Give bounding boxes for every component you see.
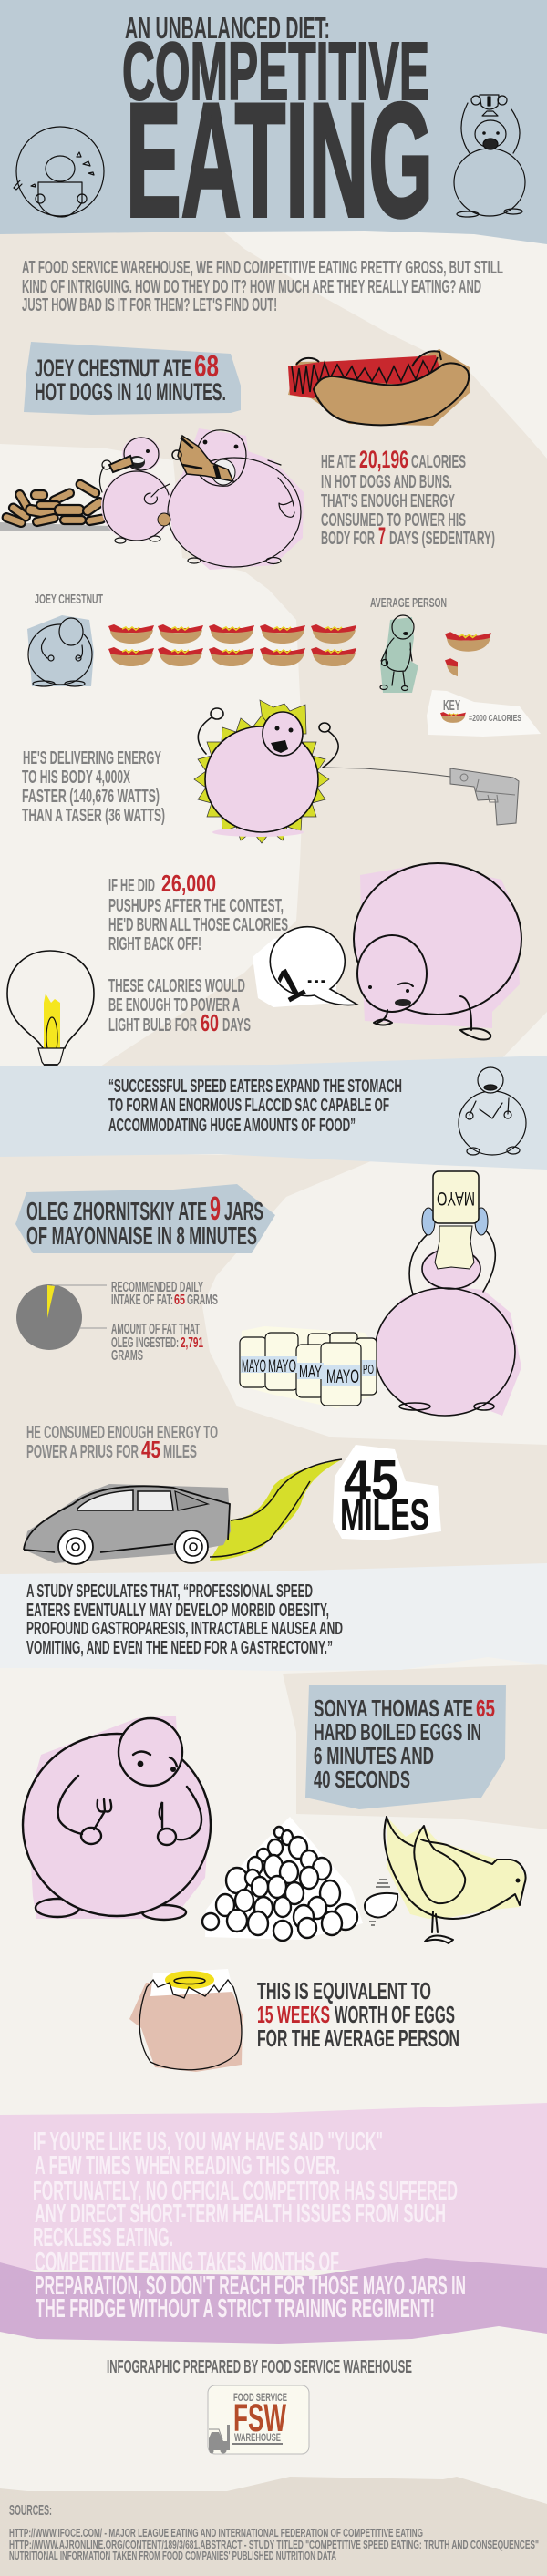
callout: Sonya Thomas: 40 SECONDS: [314, 1766, 410, 1793]
panel: sources: NUTRITIONAL INFORMATION TAKEN FROM FOOD COMPANIES' PUBLISHED NUTRITION DATA: [9, 2549, 336, 2562]
illustration: egg pile: [202, 1817, 363, 1941]
conclusion text: RECKLESS EATING.: [33, 2223, 173, 2252]
legend: key: KEY: [443, 698, 460, 714]
title: [122, 11, 433, 251]
speech text: ...: [306, 968, 326, 986]
icon: taser gun with wire: [325, 768, 519, 825]
stats text: calories: CALORIES: [411, 452, 466, 472]
illustration: figure drinking mayo: [375, 1171, 521, 1416]
panel: conclusion: [0, 2103, 547, 2344]
callout: Sonya Thomas: 65: [476, 1695, 495, 1722]
callout: Joey Chestnut: HOT DOGS IN 10 MINUTES.: [35, 378, 226, 406]
panel: study quote band: EATERS EVENTUALLY MAY DEVELOP MORBID OBESITY,: [26, 1601, 329, 1621]
callout: Sonya Thomas: [305, 1685, 506, 1809]
header panel: [0, 0, 547, 251]
text: light bulb: [108, 976, 251, 1036]
icon: single egg: [365, 1880, 397, 1925]
callout: Oleg Zhornitskiy: [15, 1184, 275, 1253]
callout: Oleg Zhornitskiy: 9: [210, 1190, 221, 1227]
jar labels: MAYO: [242, 1357, 266, 1376]
logo: FSW: WAREHOUSE: [234, 2431, 281, 2444]
speech text: 1: [268, 957, 312, 1012]
callout: Joey Chestnut: [24, 342, 241, 415]
jar labels: [242, 1357, 374, 1387]
icon: light bulb: [7, 951, 94, 1073]
callout: Oleg Zhornitskiy: OLEG ZHORNITSKIY ATE: [26, 1197, 207, 1225]
illustration: small figure feeding hot dog: [99, 437, 172, 543]
graphic: 45 miles: 45: [344, 1449, 398, 1512]
jar labels: PO: [363, 1362, 374, 1377]
panel: sources: [0, 2477, 547, 2576]
jar label: MAYO: [437, 1188, 475, 1209]
illustration: figure with fork and knife: [23, 1716, 211, 1920]
text: 15 weeks: 15 WEEKS: [257, 2001, 330, 2028]
chart labels: RECOMMENDED DAILY: [111, 1280, 203, 1295]
stats text: calories: HE ATE: [321, 452, 356, 472]
illustration: mayo jars: [239, 1326, 377, 1408]
chart labels: GRAMS: [187, 1293, 218, 1308]
chart labels: [111, 1280, 218, 1364]
text: light bulb: 60: [201, 1009, 219, 1036]
icon: large hot dog: [288, 349, 470, 426]
panel: study quote band: A STUDY SPECULATES THAT, “PROFESSIONAL SPEED: [26, 1582, 313, 1602]
stats text: calories: IN HOT DOGS AND BUNS.: [321, 472, 452, 492]
chart labels: INTAKE OF FAT:: [111, 1293, 173, 1308]
chart labels: 65: [174, 1293, 185, 1308]
text: delivering energy: TO HIS BODY 4,000X: [22, 768, 130, 788]
text: pushups: HE'D BURN ALL THOSE CALORIES: [108, 915, 288, 935]
text: 15 weeks: WORTH OF EGGS: [335, 2001, 455, 2028]
text: light bulb: BE ENOUGH TO POWER A: [108, 995, 240, 1015]
comparison: average person: AVERAGE PERSON: [370, 596, 447, 611]
text: Prius: [26, 1423, 218, 1463]
illustration: car with exhaust: [24, 1459, 342, 1564]
panel: study quote band: VOMITING, AND EVEN THE NEED FOR A GASTRECTOMY.”: [26, 1638, 333, 1658]
chart labels: GRAMS: [111, 1348, 143, 1364]
icon: figure with cutlery: [459, 1067, 526, 1155]
text: delivering energy: THAN A TASER (36 WATTS): [22, 806, 165, 826]
text: 15 weeks: THIS IS EQUIVALENT TO: [257, 1977, 431, 2004]
jar labels: MAY: [299, 1363, 322, 1381]
stats text: calories: 20,196: [359, 446, 408, 473]
text: pushups: RIGHT BACK OFF!: [108, 934, 201, 954]
text: pushups: PUSHUPS AFTER THE CONTEST,: [108, 896, 284, 916]
quote text: ACCOMMODATING HUGE AMOUNTS OF FOOD”: [108, 1116, 356, 1136]
panel: study quote band: PROFOUND GASTROPARESIS, INTRACTABLE NAUSEA AND: [26, 1619, 343, 1639]
stats text: calories: 7: [378, 522, 386, 550]
legend: key: [427, 690, 541, 737]
illustration: cracked egg: [129, 1969, 243, 2072]
text: light bulb: DAYS: [222, 1015, 251, 1036]
stats text: calories: THAT'S ENOUGH ENERGY: [321, 491, 455, 511]
conclusion text: [33, 2128, 466, 2324]
text: Prius: POWER A PRIUS FOR: [26, 1442, 139, 1462]
text: light bulb: THESE CALORIES WOULD: [108, 976, 245, 996]
illustration: chicken: [384, 1817, 527, 1943]
logo: FSW: FSW: [233, 2396, 286, 2440]
icon: figure eating from bowl: [14, 127, 104, 217]
text: delivering energy: [22, 748, 165, 826]
hot dog pictogram: 1.25 units: [445, 632, 491, 678]
illustration: hot dog pile on plate: [0, 479, 111, 531]
icon: blue figure: [27, 615, 94, 686]
text: delivering energy: HE'S DELIVERING ENERGY: [23, 748, 161, 768]
title: AN UNBALANCED DIET:: [125, 11, 330, 45]
text: pushups: IF HE DID: [108, 876, 155, 896]
illustration: Joey Chestnut big figure eating: [158, 428, 304, 570]
stats text: calories: BODY FOR: [321, 529, 375, 549]
chart labels: AMOUNT OF FAT THAT: [111, 1322, 200, 1337]
icon: green figure: [380, 615, 418, 693]
chart labels: 2,791: [181, 1335, 203, 1351]
graphic: 45 miles: [333, 1445, 441, 1540]
illustration: figure doing pushup with speech bubble: [253, 863, 521, 1039]
logo: FSW: [208, 2385, 309, 2454]
callout: Joey Chestnut: JOEY CHESTNUT ATE: [35, 355, 191, 382]
comparison: average person: [370, 596, 491, 693]
comparison: Joey Chestnut: JOEY CHESTNUT: [35, 592, 103, 607]
text: Prius: 45: [141, 1436, 160, 1463]
text: light bulb: LIGHT BULB FOR: [108, 1015, 197, 1036]
text: 15 weeks: [257, 1977, 459, 2052]
text: delivering energy: FASTER (140,676 WATTS): [22, 787, 160, 807]
stats text: calories: [321, 446, 495, 550]
logo: FSW: FOOD SERVICE: [233, 2391, 287, 2404]
text: Prius: HE CONSUMED ENOUGH ENERGY TO: [26, 1423, 218, 1443]
panel: sources: SOURCES:: [9, 2503, 52, 2519]
pie chart: [16, 1280, 218, 1364]
text: Prius: MILES: [163, 1442, 197, 1462]
intro text: [22, 258, 503, 315]
graphic: 45 miles: MILES: [340, 1491, 429, 1540]
hot dog pictogram: 10 units: [108, 624, 356, 666]
jar labels: MAYO: [326, 1366, 359, 1387]
quote text: [108, 1077, 402, 1136]
jar labels: MAYO: [268, 1357, 296, 1376]
legend: key: =2000 CALORIES: [469, 713, 521, 724]
panel: quote band: [0, 1056, 547, 1170]
text: pushups: 26,000: [161, 870, 216, 897]
illustration: electrified figure: [194, 700, 338, 843]
callout: Sonya Thomas: 6 MINUTES AND: [314, 1742, 434, 1769]
panel: study quote band: [0, 1563, 547, 1671]
callout: Oleg Zhornitskiy: OF MAYONNAISE IN 8 MINUTES: [26, 1221, 257, 1250]
callout: Joey Chestnut: 68: [194, 349, 219, 383]
text: pushups: [108, 870, 288, 954]
intro text: JUST HOW BAD IS IT FOR THEM? LET'S FIND OUT!: [22, 295, 277, 315]
comparison: Joey Chestnut: [27, 592, 356, 686]
chart labels: OLEG INGESTED:: [111, 1335, 179, 1351]
callout: Oleg Zhornitskiy: JARS: [224, 1197, 263, 1225]
icon: figure holding trophy: [454, 95, 525, 217]
